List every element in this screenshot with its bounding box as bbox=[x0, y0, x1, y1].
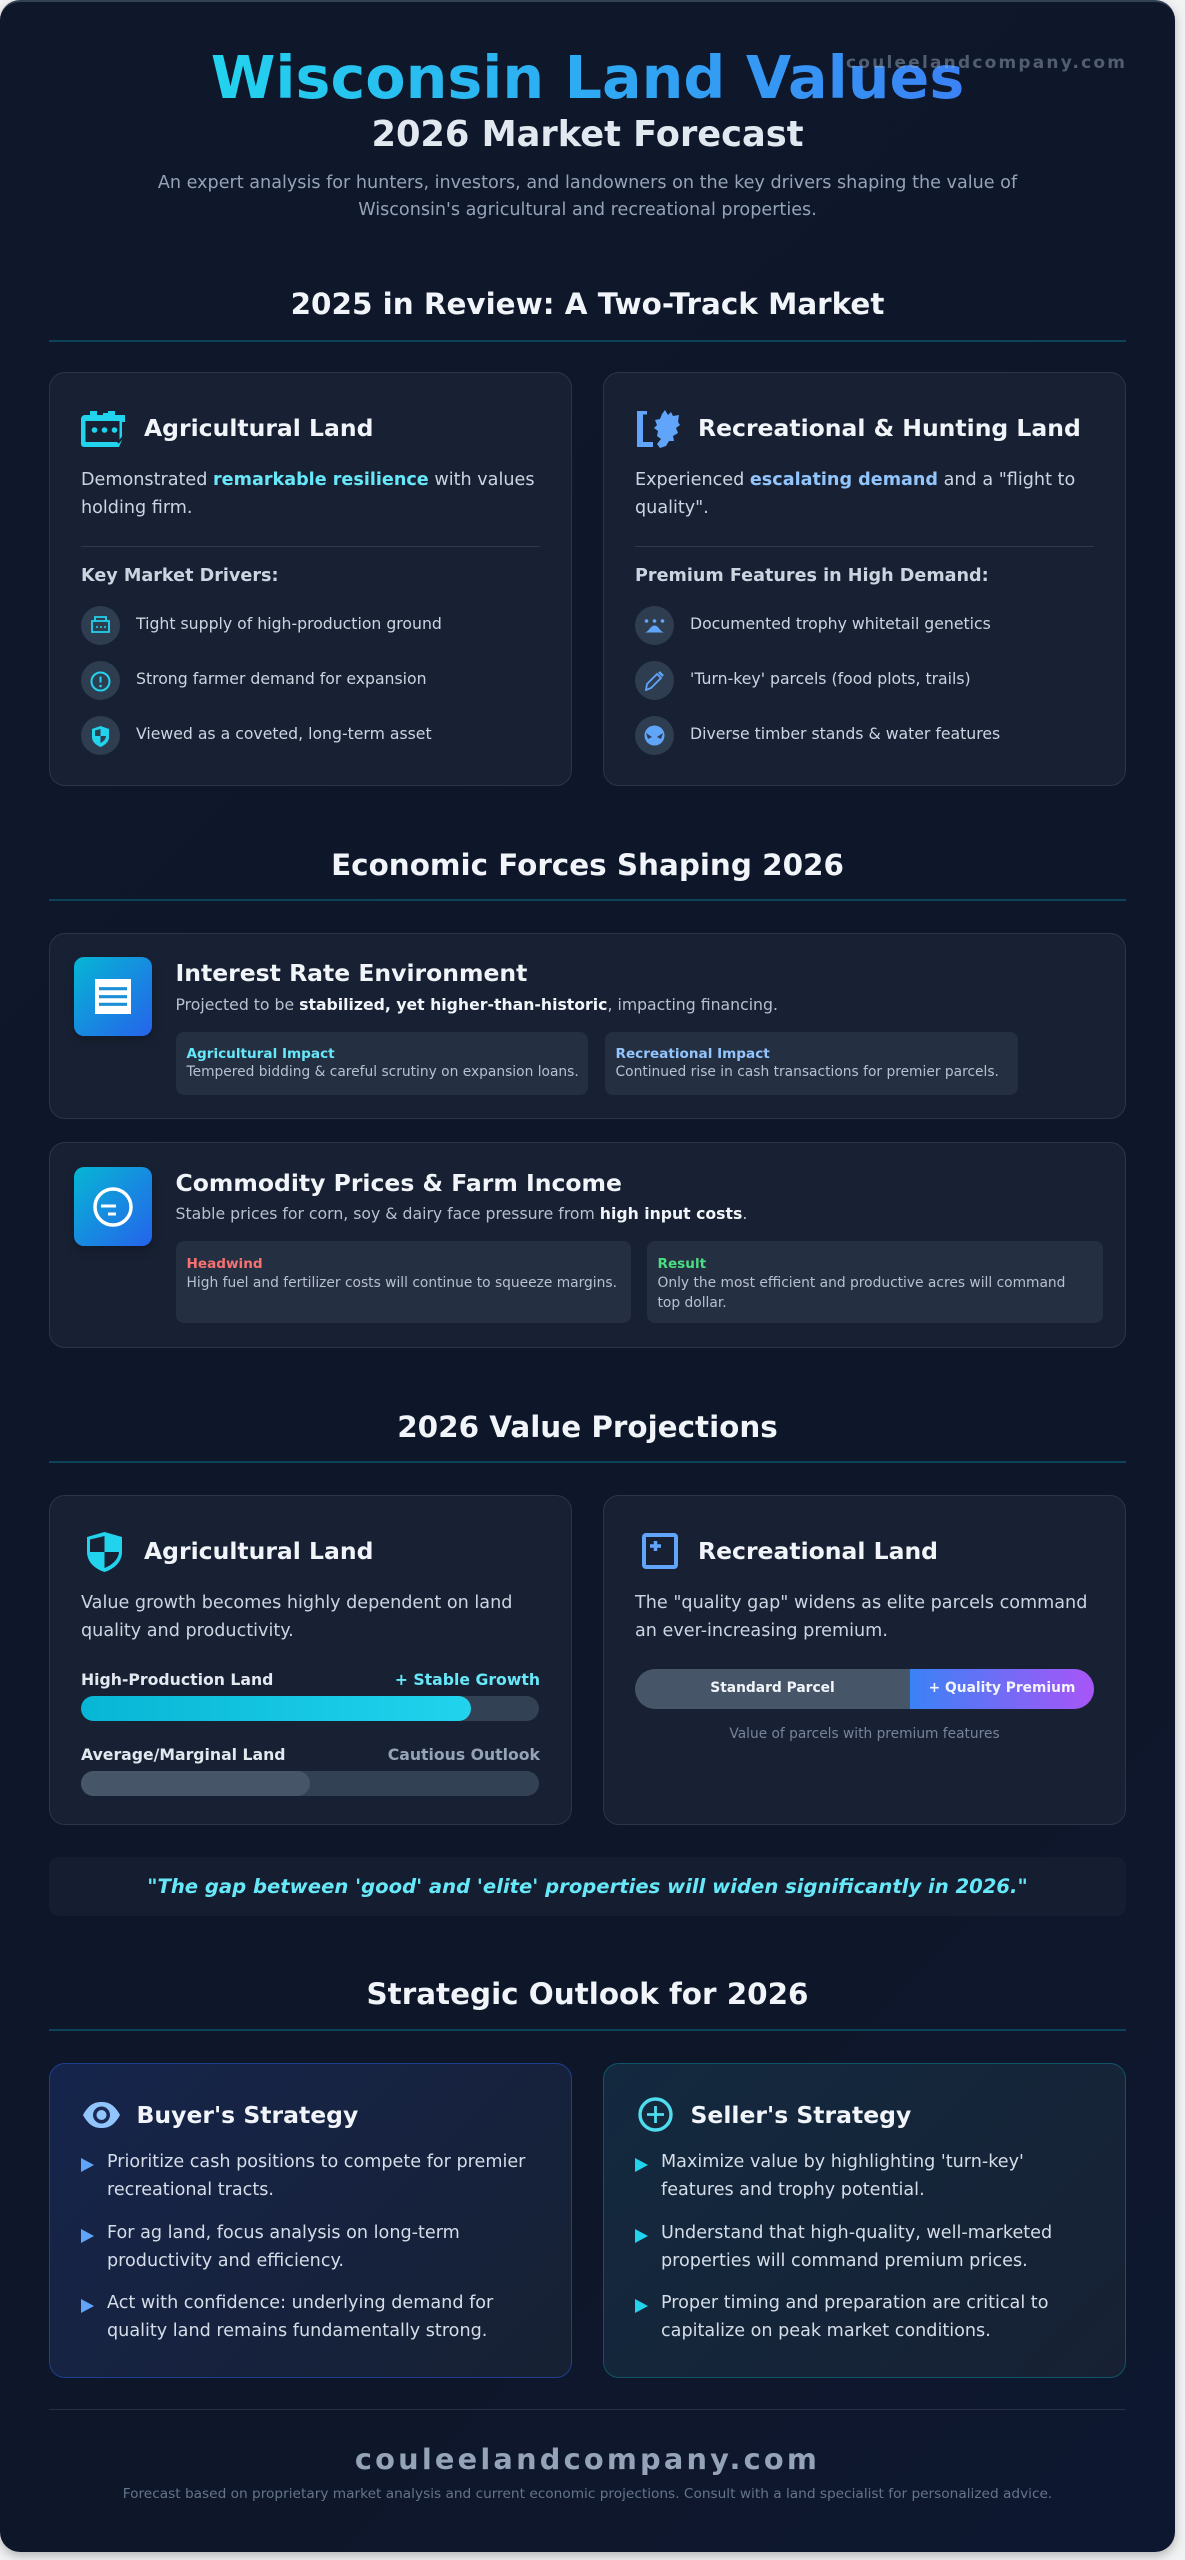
description: quality and productivity. bbox=[81, 1620, 294, 1640]
icon: plus square bbox=[642, 1533, 678, 1569]
box: result: Only the most efficient and productive acres will command bbox=[658, 1275, 1065, 1291]
strategy list: productivity and efficiency. bbox=[107, 2250, 344, 2270]
intro text: Wisconsin's agricultural and recreational properties. bbox=[358, 200, 817, 220]
icon: circled plus bbox=[638, 2097, 673, 2132]
progress: high-production land: High-Production Land bbox=[81, 1670, 273, 1689]
heading: strategic outlook: Strategic Outlook for 2026 bbox=[366, 1977, 808, 2011]
card title: Recreational & Hunting Land bbox=[698, 414, 1081, 442]
description: quality". bbox=[635, 498, 709, 518]
box: agricultural impact: Agricultural Impact bbox=[186, 1046, 335, 1062]
card title: Interest Rate Environment bbox=[176, 959, 527, 987]
box: recreational impact bbox=[604, 1032, 1018, 1095]
subheading: Key Market Drivers: bbox=[81, 566, 278, 586]
description: The "quality gap" widens as elite parcels command bbox=[635, 1593, 1087, 1613]
strategy list: For ag land, focus analysis on long-term bbox=[107, 2223, 460, 2243]
description bbox=[635, 470, 1075, 518]
box: result bbox=[646, 1241, 1102, 1323]
driver item: long-term asset: Viewed as a coveted, long-term asset bbox=[136, 724, 432, 743]
progress: high-production land bbox=[81, 1670, 540, 1721]
description: an ever-increasing premium. bbox=[635, 1620, 888, 1640]
footer disclaimer: Forecast based on proprietary market analysis and current economic projections. Consult with a land specialist for personalized advice. bbox=[123, 2486, 1052, 2502]
bar: quality premium bbox=[635, 1669, 1094, 1709]
feature item: genetics bbox=[635, 606, 991, 645]
subheading: Premium Features in High Demand: bbox=[635, 566, 989, 586]
intro text bbox=[158, 173, 1018, 220]
description: Value growth becomes highly dependent on land bbox=[81, 1593, 512, 1613]
description bbox=[81, 1593, 512, 1640]
description: Experienced escalating demand and a "flight to bbox=[635, 470, 1075, 490]
strategy list: Maximize value by highlighting 'turn-key' bbox=[661, 2152, 1024, 2172]
heading: 2025 in review: 2025 in Review: A Two-Track Market bbox=[291, 287, 884, 321]
box: recreational impact: Continued rise in cash transactions for premier parcels. bbox=[616, 1064, 999, 1080]
box: result: Result bbox=[658, 1256, 706, 1272]
description: holding firm. bbox=[81, 498, 193, 518]
feature item: turn-key: 'Turn-key' parcels (food plots, trails) bbox=[690, 669, 971, 688]
icon: tractor bbox=[81, 411, 125, 447]
driver item: long-term asset bbox=[81, 716, 432, 755]
callout bbox=[49, 1857, 1126, 1916]
icon: eye bbox=[83, 2102, 120, 2128]
description: Stable prices for corn, soy & dairy face pressure from high input costs. bbox=[176, 1204, 747, 1223]
description bbox=[81, 470, 534, 518]
caption: Value of parcels with premium features bbox=[729, 1726, 1000, 1742]
bar: quality premium: + Quality Premium bbox=[929, 1680, 1075, 1696]
strategy list: Act with confidence: underlying demand for bbox=[107, 2293, 493, 2313]
strategy list: Proper timing and preparation are critical to bbox=[661, 2293, 1048, 2313]
panel: recreational land review bbox=[603, 372, 1126, 786]
panel: agricultural land review bbox=[49, 372, 572, 786]
strategy list bbox=[635, 2152, 1052, 2340]
progress: high-production land: + Stable Growth bbox=[395, 1670, 540, 1689]
strategy list: recreational tracts. bbox=[107, 2180, 274, 2200]
progress: average land: Cautious Outlook bbox=[388, 1745, 540, 1764]
icon: shield bbox=[87, 1532, 122, 1572]
watermark: couleelandcompany.com bbox=[846, 53, 1127, 73]
panel: seller's strategy bbox=[603, 2063, 1126, 2378]
driver item: farmer demand bbox=[81, 661, 427, 700]
panel: recreational projection bbox=[603, 1495, 1126, 1825]
feature item: timber and water: Diverse timber stands & water features bbox=[690, 724, 1000, 743]
box: recreational impact: Recreational Impact bbox=[616, 1046, 770, 1062]
feature item: genetics: Documented trophy whitetail genetics bbox=[690, 614, 991, 633]
intro text: An expert analysis for hunters, investors, and landowners on the key drivers shaping the value of bbox=[158, 173, 1017, 193]
strategy list: Prioritize cash positions to compete for premier bbox=[107, 2152, 525, 2172]
panel: interest rate environment bbox=[49, 933, 1126, 1119]
progress: average land: Average/Marginal Land bbox=[81, 1745, 285, 1764]
callout: "The gap between 'good' and 'elite' properties will widen significantly in 2026." bbox=[147, 1875, 1028, 1898]
feature item: timber and water bbox=[635, 716, 1000, 755]
box: headwind: High fuel and fertilizer costs will continue to squeeze margins. bbox=[186, 1275, 617, 1291]
driver item: farmer demand: Strong farmer demand for expansion bbox=[136, 669, 427, 688]
strategy list bbox=[81, 2152, 526, 2340]
box: headwind bbox=[176, 1241, 630, 1323]
card title: Agricultural Land bbox=[144, 414, 373, 442]
heading: value projections: 2026 Value Projections bbox=[397, 1410, 778, 1444]
icon: document lines bbox=[74, 957, 152, 1036]
bar: quality premium: Standard Parcel bbox=[710, 1680, 835, 1696]
card title: Buyer's Strategy bbox=[136, 2101, 358, 2129]
footer brand: couleelandcompany.com bbox=[355, 2442, 820, 2476]
card title: Recreational Land bbox=[698, 1537, 938, 1565]
description bbox=[634, 1593, 1087, 1640]
strategy list: Understand that high-quality, well-marketed bbox=[661, 2223, 1052, 2243]
driver item: tight supply bbox=[81, 606, 442, 645]
box: result: top dollar. bbox=[658, 1294, 727, 1310]
icon: map with splat bbox=[637, 410, 680, 448]
strategy list: features and trophy potential. bbox=[661, 2180, 925, 2200]
box: headwind: Headwind bbox=[186, 1256, 263, 1272]
card title: Agricultural Land bbox=[144, 1537, 373, 1565]
panel: commodity prices bbox=[49, 1142, 1126, 1348]
progress: average land bbox=[81, 1745, 540, 1796]
description: Demonstrated remarkable resilience with values bbox=[81, 470, 534, 490]
heading: economic forces: Economic Forces Shaping 2026 bbox=[331, 848, 844, 882]
description: Projected to be stabilized, yet higher-than-historic, impacting financing. bbox=[176, 995, 778, 1014]
panel: agricultural projection bbox=[49, 1495, 572, 1825]
subtitle: 2026 Market Forecast bbox=[371, 114, 804, 155]
card title: Commodity Prices & Farm Income bbox=[176, 1169, 622, 1197]
strategy list: properties will command premium prices. bbox=[661, 2250, 1028, 2270]
box: agricultural impact bbox=[176, 1032, 588, 1095]
strategy list: quality land remains fundamentally strong. bbox=[107, 2320, 487, 2340]
box: agricultural impact: Tempered bidding & careful scrutiny on expansion loans. bbox=[186, 1064, 579, 1080]
strategy list: capitalize on peak market conditions. bbox=[661, 2320, 991, 2340]
icon: circle with lines bbox=[74, 1167, 152, 1246]
panel: buyer's strategy bbox=[49, 2063, 572, 2378]
driver item: tight supply: Tight supply of high-production ground bbox=[136, 614, 442, 633]
card title: Seller's Strategy bbox=[690, 2101, 911, 2129]
feature item: turn-key bbox=[635, 661, 971, 700]
title: Wisconsin Land Values bbox=[211, 44, 964, 112]
